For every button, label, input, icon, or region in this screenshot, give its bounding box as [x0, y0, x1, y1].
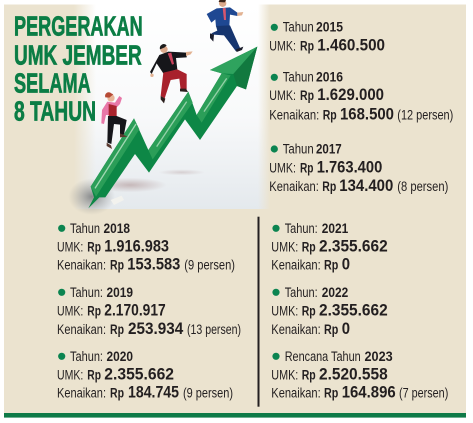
entry: Tahun 2022 — [271, 285, 388, 338]
entry: Tahun 2017 — [269, 141, 448, 195]
entry: Tahun 2015: UMK: — [269, 39, 296, 54]
entry: Tahun 2016: (12 persen) — [397, 107, 453, 122]
icon: man in blue suit — [207, 0, 243, 52]
entry: Tahun 2018: Kenaikan: — [57, 258, 106, 273]
entry: Tahun 2021: Rp — [302, 240, 316, 255]
entry: Tahun 2021 — [271, 221, 388, 274]
entry: Tahun 2017: Tahun — [283, 141, 314, 156]
entry: Tahun 2016: Kenaikan: — [269, 107, 319, 122]
entry: Tahun 2021: Rp — [324, 258, 338, 273]
entry: Tahun 2019: Tahun: — [70, 285, 103, 300]
entry: Tahun 2020: 2020 — [106, 349, 133, 364]
entry: Tahun 2021: 0 — [342, 256, 350, 274]
entry: Rencana Tahun 2023: (7 persen) — [399, 386, 448, 400]
entry: Tahun 2020: 184.745 — [128, 384, 179, 402]
entry: Tahun 2022: Rp — [302, 304, 316, 319]
entry: Tahun 2019: Kenaikan: — [57, 322, 106, 337]
entry: Tahun 2018: Rp — [110, 258, 124, 273]
entry: Tahun 2017: UMK: — [269, 161, 296, 176]
entry: Tahun 2022: 2.355.662 — [319, 302, 388, 320]
entry: Tahun 2015: Rp — [300, 39, 314, 54]
entry: Tahun 2018: (9 persen) — [184, 258, 235, 273]
entry: Tahun 2020: (9 persen) — [183, 386, 233, 400]
entry: Tahun 2018: Tahun — [70, 221, 100, 236]
entry: Tahun 2022: Tahun: — [285, 285, 318, 300]
entry: Tahun 2016: UMK: — [269, 88, 296, 103]
entry: Tahun 2022: Kenaikan: — [271, 322, 321, 337]
entry: Tahun 2018: 1.916.983 — [104, 238, 169, 256]
title — [14, 10, 143, 127]
entry: Tahun 2018: 2018 — [104, 221, 130, 236]
entry: Tahun 2015: 1.460.500 — [317, 37, 385, 55]
entry: Tahun 2021: Tahun: — [285, 221, 318, 236]
entry: Tahun 2020: Kenaikan: — [57, 386, 106, 400]
entry: Rencana Tahun 2023: Rp — [324, 386, 338, 400]
entry: Tahun 2022: 2022 — [322, 285, 348, 300]
entry: Tahun 2020: 2.355.662 — [104, 365, 174, 383]
icon: man in red trousers — [150, 44, 193, 103]
entry: Tahun 2018: Rp — [87, 240, 101, 255]
entry: Tahun 2018 — [57, 221, 235, 274]
entry: Tahun 2015: 2015 — [316, 20, 343, 35]
entry: Tahun 2021: 2.355.662 — [319, 238, 388, 256]
entry: Rencana Tahun 2023: 2023 — [364, 349, 393, 364]
entry: Tahun 2017: 134.400 — [339, 177, 393, 195]
entry: Tahun 2017: Rp — [300, 161, 314, 176]
footer: green bar — [4, 413, 466, 418]
entry: Rencana Tahun 2023: 2.520.558 — [319, 365, 388, 383]
entry: Tahun 2020: Tahun: — [70, 349, 103, 364]
entry: Tahun 2022: Rp — [324, 322, 338, 337]
entry: Rencana Tahun 2023 — [271, 349, 448, 402]
entry: Tahun 2016: 168.500 — [340, 105, 394, 123]
entry: Rencana Tahun 2023: UMK: — [271, 367, 298, 382]
entry: Tahun 2022: UMK: — [271, 304, 298, 319]
entry: Tahun 2020: UMK: — [57, 367, 83, 382]
entry: Tahun 2019: 2019 — [106, 285, 133, 300]
entry: Tahun 2017: Rp — [322, 179, 336, 194]
entry: Tahun 2019: 253.934 — [128, 320, 184, 338]
illustration: rising arrow with climbing workers — [4, 0, 270, 215]
entry: Tahun 2019 — [57, 285, 241, 338]
entry: Tahun 2015: Tahun — [283, 20, 314, 35]
entry: Tahun 2022: 0 — [342, 320, 350, 338]
entry: Tahun 2019: Rp — [110, 322, 124, 337]
entry: Tahun 2016: Tahun — [283, 70, 314, 85]
entry: Tahun 2015 — [269, 20, 385, 55]
entry: Rencana Tahun 2023: Rencana Tahun — [285, 349, 361, 364]
entry: Tahun 2017: 1.763.400 — [317, 159, 382, 177]
entry: Tahun 2020 — [57, 349, 233, 402]
entry: Tahun 2020: Rp — [87, 367, 101, 382]
entry: Tahun 2019: (13 persen) — [187, 322, 241, 337]
entry: Tahun 2018: 153.583 — [127, 256, 180, 274]
entry: Tahun 2018: UMK: — [57, 240, 83, 255]
icon: woman climbing — [101, 92, 128, 149]
entry: Rencana Tahun 2023: Kenaikan: — [271, 386, 321, 400]
entry: Tahun 2017: 2017 — [316, 141, 342, 156]
entry: Tahun 2016: 2016 — [316, 70, 343, 85]
entry: Tahun 2016: 1.629.000 — [317, 86, 384, 104]
icon: rising green arrow — [88, 47, 257, 208]
title: PERGERAKAN — [14, 10, 143, 41]
entry: Tahun 2017: Kenaikan: — [269, 179, 319, 194]
entry: Rencana Tahun 2023: Rp — [302, 367, 316, 382]
entry: Tahun 2016: Rp — [323, 107, 337, 122]
entry: Tahun 2021: UMK: — [271, 240, 298, 255]
entry: Tahun 2019: Rp — [87, 304, 101, 319]
entry: Tahun 2016 — [269, 70, 453, 123]
title: SELAMA — [14, 68, 91, 99]
entry: Rencana Tahun 2023: 164.896 — [342, 384, 396, 402]
divider: vertical column rule — [258, 217, 260, 407]
entry: Tahun 2019: UMK: — [57, 304, 83, 319]
title: UMK JEMBER — [14, 40, 142, 70]
entry: Tahun 2019: 2.170.917 — [104, 302, 166, 320]
entry: Tahun 2020: Rp — [110, 386, 124, 400]
entry: Tahun 2016: Rp — [300, 88, 314, 103]
entry: Tahun 2021: Kenaikan: — [271, 258, 321, 273]
entry: Tahun 2017: (8 persen) — [397, 179, 448, 194]
entry: Tahun 2021: 2021 — [322, 221, 349, 236]
title: 8 TAHUN — [14, 96, 96, 127]
